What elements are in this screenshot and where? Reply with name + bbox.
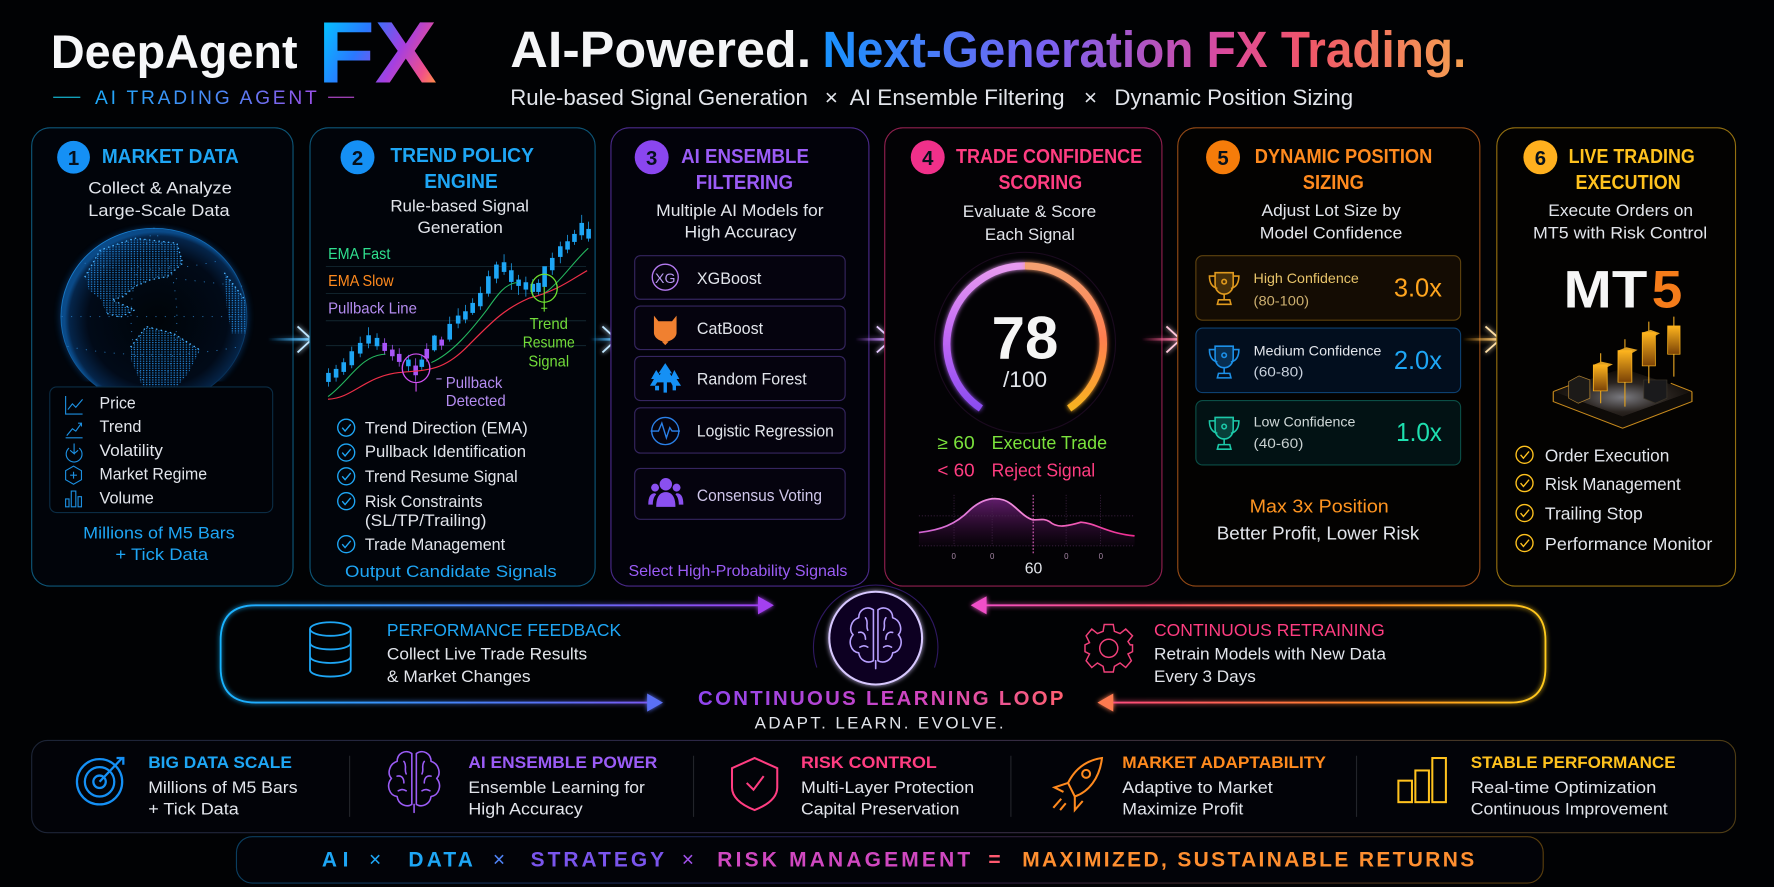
brain emblem xyxy=(813,585,938,684)
icon: XG: XG xyxy=(655,270,675,286)
formula text: MAXIMIZED, SUSTAINABLE RETURNS xyxy=(1022,849,1474,872)
score value: 78 xyxy=(992,305,1058,372)
benefit: stable performance: STABLE PERFORMANCE xyxy=(1471,754,1676,772)
heading: DYNAMIC POSITION xyxy=(1255,146,1432,168)
icon: regression pulse xyxy=(651,417,680,445)
icon: group xyxy=(648,478,683,507)
execute threshold xyxy=(937,433,1107,453)
consensus voting xyxy=(635,468,845,519)
benefit: stable performance: Real-time Optimization xyxy=(1471,779,1656,797)
checklist: Trend Direction (EMA) xyxy=(365,418,528,437)
checklist: Order Execution xyxy=(1545,446,1669,466)
icon: price xyxy=(66,396,83,414)
arrow: step 2 to 3 xyxy=(591,326,617,352)
reject threshold xyxy=(937,460,1095,480)
panel: AI ensemble filtering xyxy=(611,128,869,586)
performance feedback text: PERFORMANCE FEEDBACK xyxy=(387,620,621,640)
icon: volume xyxy=(66,491,81,507)
icon: blue trophy xyxy=(1209,346,1239,378)
description xyxy=(88,178,232,220)
main title xyxy=(510,21,1466,78)
item: price: Price xyxy=(100,394,136,412)
icon: brain xyxy=(389,752,440,812)
tier: high confidence: (80-100) xyxy=(1254,292,1309,308)
icon: trend xyxy=(66,423,83,438)
benefit: market adaptability xyxy=(1053,754,1326,819)
label: pullback line: Pullback Line xyxy=(328,300,417,317)
model: CatBoost: CatBoost xyxy=(697,320,764,338)
subtitle: Rule-based Signal Generation xyxy=(510,85,808,110)
heading: AI ENSEMBLE xyxy=(681,146,809,168)
continuous retraining text: Every 3 Days xyxy=(1154,668,1256,686)
callout: pullback detected xyxy=(446,375,506,410)
checklist: Trend Resume Signal xyxy=(365,467,518,486)
callout: trend resume signal: Trend xyxy=(529,316,568,333)
label: EMA slow: EMA Slow xyxy=(328,273,395,290)
tier: medium confidence: (60-80) xyxy=(1254,364,1303,380)
globe xyxy=(58,227,250,407)
multiplier 1.0x: 1.0x xyxy=(1396,417,1442,447)
benefit: big data scale xyxy=(77,754,298,819)
step number 4 xyxy=(911,140,945,174)
benefit: risk control xyxy=(732,754,974,819)
benefit: big data scale: BIG DATA SCALE xyxy=(148,754,292,772)
step number 1: 1 xyxy=(68,148,79,170)
subtitle: Dynamic Position Sizing xyxy=(1114,85,1353,110)
benefit note: Better Profit, Lower Risk xyxy=(1217,524,1420,544)
formula text: × xyxy=(369,849,381,872)
formula text: STRATEGY xyxy=(531,849,664,872)
tier: low confidence xyxy=(1196,401,1461,465)
item: volatility: Volatility xyxy=(100,442,164,460)
formula text: AI xyxy=(322,849,348,872)
step number 2 xyxy=(341,140,374,174)
model: logistic regression xyxy=(635,408,845,453)
continuous retraining text: Retrain Models with New Data xyxy=(1154,646,1387,664)
heading: TRADE CONFIDENCE xyxy=(956,146,1142,168)
benefit: risk control: Capital Preservation xyxy=(801,801,959,819)
continuous learning loop xyxy=(221,585,1545,733)
header logo xyxy=(51,5,437,109)
benefit: risk control: Multi-Layer Protection xyxy=(801,779,974,797)
description: Collect & Analyze xyxy=(88,178,232,197)
tier: low confidence: Low Confidence xyxy=(1254,414,1356,430)
heading: MARKET DATA xyxy=(102,146,239,168)
description xyxy=(1533,201,1707,243)
data note xyxy=(83,524,235,564)
formula text: DATA xyxy=(408,849,473,872)
checklist: Trailing Stop xyxy=(1545,503,1643,523)
model: XGBoost: XGBoost xyxy=(697,270,762,288)
model: random forest xyxy=(635,356,845,401)
performance feedback text xyxy=(387,620,621,686)
benefits strip xyxy=(32,740,1736,833)
output note: Output Candidate Signals xyxy=(345,562,557,581)
execute threshold: Execute Trade xyxy=(992,433,1107,453)
heading: SCORING xyxy=(998,172,1082,194)
checklist: (SL/TP/Trailing) xyxy=(365,511,486,530)
arrow: step 5 to 6 xyxy=(1463,326,1500,352)
tier: high confidence xyxy=(1196,256,1461,320)
continuous retraining text xyxy=(1154,620,1387,686)
checklist: Performance Monitor xyxy=(1545,534,1713,554)
checklist: Pullback Identification xyxy=(365,442,526,461)
panel: trade confidence scoring xyxy=(885,128,1162,586)
confidence gauge xyxy=(935,252,1116,433)
item: trend: Trend xyxy=(100,418,141,436)
panel: dynamic position sizing xyxy=(1178,128,1480,586)
reject threshold: < 60 xyxy=(937,460,975,480)
step number 6: 6 xyxy=(1535,148,1546,170)
model: random forest: Random Forest xyxy=(697,371,807,389)
data list xyxy=(50,387,273,513)
MT5 logo xyxy=(1564,261,1682,320)
data note: Millions of M5 Bars xyxy=(83,524,235,543)
callout: pullback detected: Pullback xyxy=(446,375,503,392)
icon: target xyxy=(77,758,123,804)
heading xyxy=(681,146,809,194)
step number 4: 4 xyxy=(922,148,934,170)
benefit: risk control: RISK CONTROL xyxy=(801,754,937,772)
description xyxy=(656,201,824,242)
item: market regime: Market Regime xyxy=(100,466,207,484)
benefit: AI ensemble power: High Accuracy xyxy=(468,801,584,819)
benefit: market adaptability: Adaptive to Market xyxy=(1122,779,1273,797)
output note: Select High-Probability Signals xyxy=(628,563,847,580)
subtitle xyxy=(510,85,1353,110)
description: High Accuracy xyxy=(684,223,797,242)
illustration: 3D candlesticks xyxy=(1549,317,1696,430)
execute threshold: ≥ 60 xyxy=(937,433,975,453)
icon: market regime xyxy=(66,466,81,484)
formula text: × xyxy=(493,849,505,872)
MT5 logo: MT xyxy=(1564,261,1647,320)
formula text: × xyxy=(682,849,694,872)
score distribution chart xyxy=(919,495,1135,578)
loop arrow: feedback xyxy=(221,596,774,712)
loop arrow: retraining xyxy=(971,596,1545,712)
formula text: RISK MANAGEMENT xyxy=(717,849,970,872)
max position note: Max 3x Position xyxy=(1250,496,1389,517)
callout: pullback detected: Detected xyxy=(446,393,506,410)
trend chart xyxy=(326,215,591,410)
step number 3 xyxy=(635,140,669,174)
description: Evaluate & Score xyxy=(963,202,1096,221)
data note: + Tick Data xyxy=(115,545,209,564)
callout: trend resume signal: Resume xyxy=(523,334,575,351)
benefit: big data scale: + Tick Data xyxy=(148,801,240,819)
checklist xyxy=(1516,446,1713,554)
performance feedback text: & Market Changes xyxy=(387,668,531,686)
checklist xyxy=(338,418,528,554)
threshold label: 60 xyxy=(1025,561,1043,578)
panel: trend policy engine xyxy=(310,128,595,586)
step number 2: 2 xyxy=(352,148,363,170)
axis ticks: 0 xyxy=(1064,552,1069,561)
subtitle: AI Ensemble Filtering xyxy=(850,85,1065,110)
arrow: step 4 to 5 xyxy=(1142,326,1181,352)
heading xyxy=(1255,146,1432,194)
label: EMA fast: EMA Fast xyxy=(328,246,391,263)
benefit: stable performance xyxy=(1398,754,1676,819)
logo FX: FX xyxy=(318,5,437,102)
panel: market data xyxy=(32,128,293,586)
step number 1 xyxy=(57,141,90,174)
step number 6 xyxy=(1523,140,1557,174)
continuous retraining text: CONTINUOUS RETRAINING xyxy=(1154,620,1385,640)
icon: gear xyxy=(1085,625,1133,672)
panel: live trading execution xyxy=(1497,128,1736,586)
description: Multiple AI Models for xyxy=(656,201,824,220)
axis ticks: 0 xyxy=(990,552,995,561)
multiplier 3.0x: 3.0x xyxy=(1394,272,1442,302)
benefit: stable performance: Continuous Improvement xyxy=(1471,801,1668,819)
axis ticks: 0 xyxy=(1099,552,1104,561)
step number 5 xyxy=(1206,140,1240,174)
benefit: big data scale: Millions of M5 Bars xyxy=(148,779,298,797)
tier: medium confidence xyxy=(1196,328,1461,393)
description xyxy=(963,202,1096,244)
heading: ENGINE xyxy=(424,171,498,193)
heading: FILTERING xyxy=(696,172,793,194)
benefit: AI ensemble power: Ensemble Learning for xyxy=(468,779,645,797)
icon: volatility xyxy=(66,444,82,462)
benefit: AI ensemble power xyxy=(389,752,657,819)
MT5 logo: 5 xyxy=(1652,261,1682,320)
formula text xyxy=(322,849,1474,872)
axis ticks: 0 xyxy=(952,552,957,561)
heading xyxy=(1569,146,1695,194)
arrow: step 3 to 4 xyxy=(855,326,892,352)
benefit: AI ensemble power: AI ENSEMBLE POWER xyxy=(468,754,657,772)
description xyxy=(1260,201,1402,243)
formula text: = xyxy=(988,849,1001,872)
performance feedback text: Collect Live Trade Results xyxy=(387,646,587,664)
description: Generation xyxy=(417,218,503,237)
tier: low confidence: (40-60) xyxy=(1254,435,1303,451)
icon: cat xyxy=(654,316,677,345)
heading xyxy=(956,146,1142,194)
benefit: market adaptability: Maximize Profit xyxy=(1122,801,1244,819)
checklist: Risk Management xyxy=(1545,474,1681,494)
arrow: step 1 to 2 xyxy=(268,326,312,352)
icon: rocket xyxy=(1053,758,1102,810)
tier: high confidence: High Confidence xyxy=(1254,270,1359,286)
description: Adjust Lot Size by xyxy=(1261,201,1401,220)
icon: shield xyxy=(732,758,777,810)
step number 5: 5 xyxy=(1217,148,1229,170)
icon: database xyxy=(310,622,351,677)
item: volume: Volume xyxy=(100,489,154,507)
formula banner xyxy=(236,837,1543,883)
heading: TREND POLICY xyxy=(390,145,534,167)
icon: XG xyxy=(652,264,678,290)
description xyxy=(390,197,529,237)
consensus voting: Consensus Voting xyxy=(697,487,822,505)
checklist: Trade Management xyxy=(365,535,505,554)
icon: bars xyxy=(1398,758,1446,802)
main title: AI-Powered. xyxy=(510,21,811,78)
reject threshold: Reject Signal xyxy=(992,460,1095,480)
description: Each Signal xyxy=(985,225,1075,244)
description: Model Confidence xyxy=(1260,224,1402,243)
model: logistic regression: Logistic Regression xyxy=(697,423,834,441)
tier: medium confidence: Medium Confidence xyxy=(1254,342,1382,358)
main title: Next-Generation FX Trading. xyxy=(823,21,1466,78)
multiplier 2.0x: 2.0x xyxy=(1394,345,1442,375)
axis ticks xyxy=(952,552,1104,561)
heading: LIVE TRADING xyxy=(1569,146,1695,168)
icon: green trophy xyxy=(1209,417,1239,449)
icon: gold trophy xyxy=(1209,273,1239,304)
loop title: CONTINUOUS LEARNING LOOP xyxy=(698,688,1063,710)
description: Large-Scale Data xyxy=(88,201,230,220)
icon: trees xyxy=(650,363,681,393)
logo wordmark: DeepAgent xyxy=(51,26,298,79)
description: Execute Orders on xyxy=(1548,201,1693,220)
benefit: market adaptability: MARKET ADAPTABILITY xyxy=(1122,754,1326,772)
heading: SIZING xyxy=(1303,172,1364,194)
subtitle: × xyxy=(825,85,838,110)
subtitle: × xyxy=(1084,85,1097,110)
step number 3: 3 xyxy=(646,148,657,170)
model: XGBoost xyxy=(635,256,845,299)
logo tagline: AI TRADING AGENT xyxy=(95,88,317,109)
loop tagline: ADAPT. LEARN. EVOLVE. xyxy=(755,714,1004,733)
heading: EXECUTION xyxy=(1575,172,1681,194)
candlesticks and EMA curves xyxy=(327,215,591,399)
heading xyxy=(390,145,534,193)
description: MT5 with Risk Control xyxy=(1533,224,1707,243)
model: CatBoost xyxy=(635,306,845,350)
callout: trend resume signal xyxy=(523,316,575,371)
checklist: Risk Constraints xyxy=(365,492,483,511)
callout: trend resume signal: Signal xyxy=(528,354,569,371)
description: Rule-based Signal xyxy=(390,197,529,216)
score max: /100 xyxy=(1003,367,1047,392)
